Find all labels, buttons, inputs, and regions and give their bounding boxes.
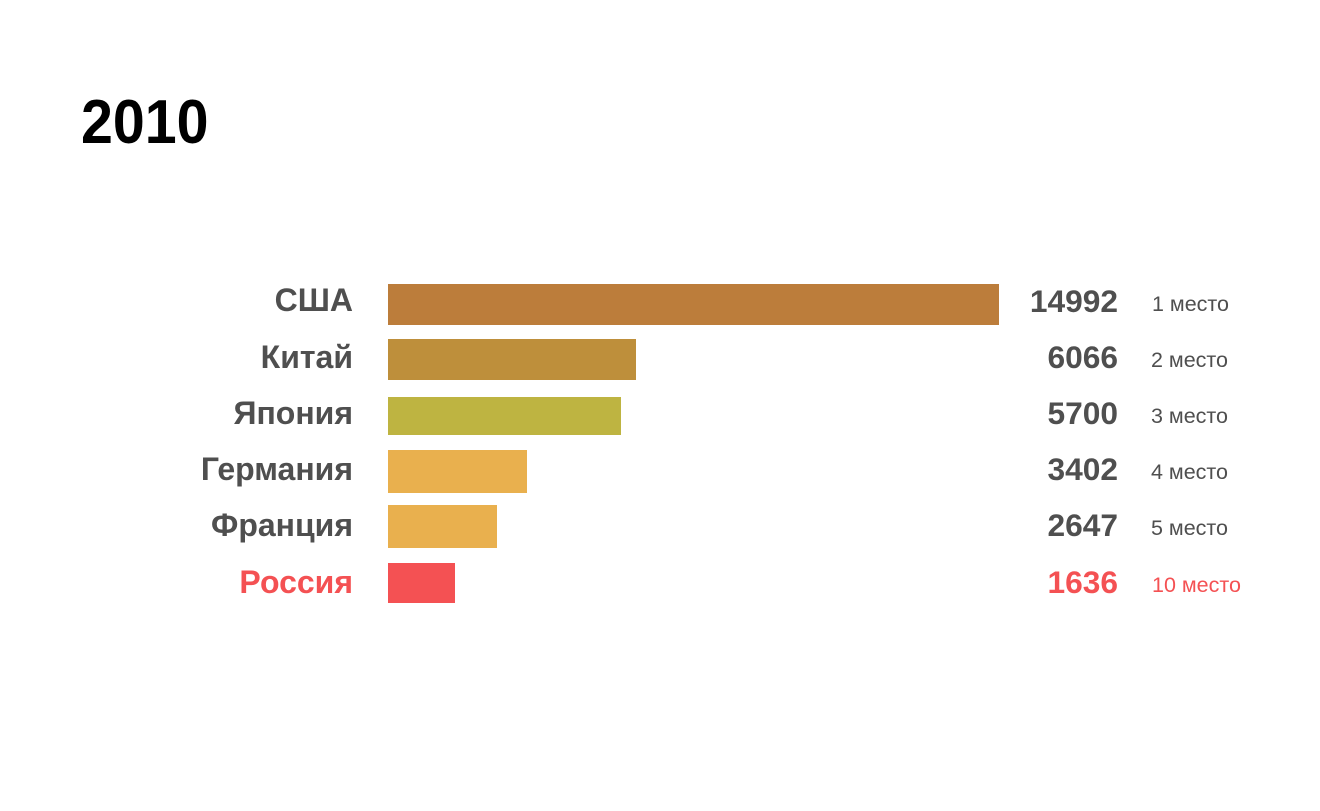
label: Россия: Россия (239, 564, 353, 600)
label: Франция: Франция (211, 507, 353, 543)
value: Россия: 1636 (1048, 564, 1118, 600)
bar: США (388, 284, 999, 325)
label: Германия: Германия (201, 451, 353, 487)
rank: Китай: 2 место (1151, 348, 1228, 372)
rank: США: 1 место (1152, 292, 1229, 316)
label: США: США (275, 282, 353, 318)
bar: Япония (388, 397, 621, 435)
rank: Франция: 5 место (1151, 516, 1228, 540)
bar: Германия (388, 450, 527, 493)
title: 2010 (80, 88, 208, 157)
rank: Россия: 10 место (1152, 573, 1241, 597)
rank: Германия: 4 место (1151, 460, 1228, 484)
value: Япония: 5700 (1048, 395, 1118, 431)
bar: Китай (388, 339, 636, 380)
bar chart (201, 282, 1241, 603)
rank: Япония: 3 место (1151, 404, 1228, 428)
label: Япония: Япония (233, 395, 353, 431)
bar: Франция (388, 505, 497, 548)
value: Китай: 6066 (1048, 339, 1118, 375)
value: Германия: 3402 (1048, 451, 1118, 487)
value: США: 14992 (1030, 283, 1118, 319)
value: Франция: 2647 (1048, 507, 1118, 543)
bar: Россия (388, 563, 455, 603)
label: Китай: Китай (261, 339, 353, 375)
